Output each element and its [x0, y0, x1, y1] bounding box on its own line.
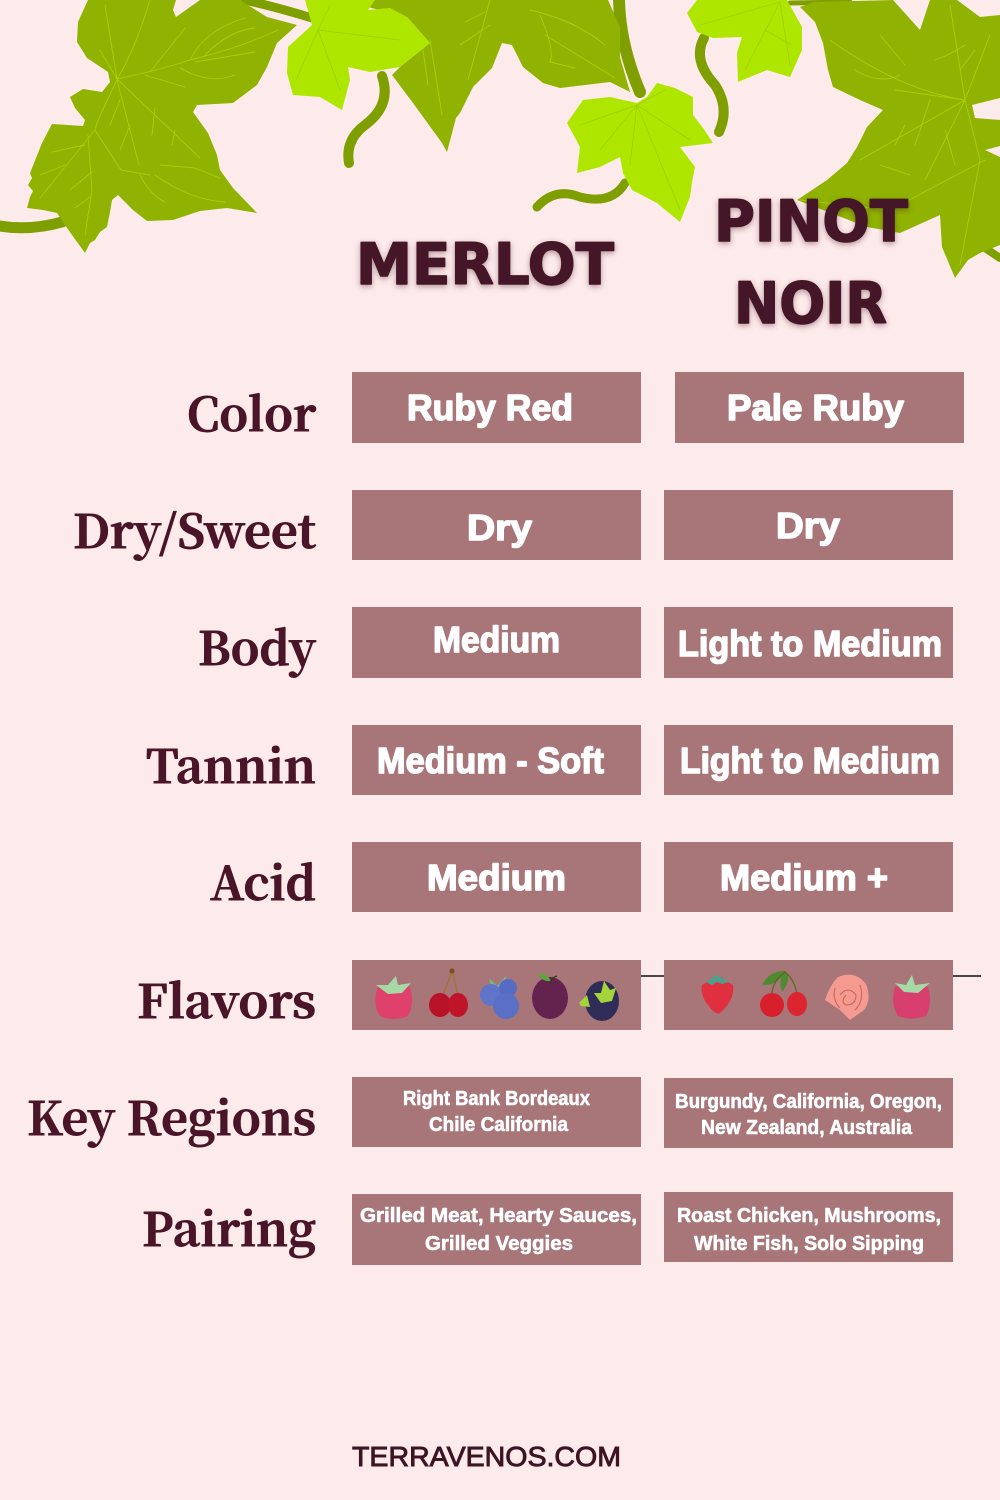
icon: raspberry	[375, 976, 412, 1019]
row: Tannin: Tannin	[146, 731, 316, 797]
column title: Merlot: MERLOT	[356, 232, 614, 298]
row: Tannin: Medium - Soft	[377, 740, 604, 781]
row: Body: Light to Medium	[678, 623, 942, 664]
light leaf centre	[567, 83, 713, 222]
row: Body	[198, 607, 953, 679]
row: Acid	[210, 842, 953, 914]
row: Key Regions: New Zealand, Australia	[701, 1117, 913, 1139]
big right leaf	[797, 0, 1000, 278]
row: Acid: Medium	[427, 857, 566, 898]
row: Color	[187, 372, 964, 445]
icon: cherries with leaves	[760, 970, 807, 1017]
footer website: TERRAVENOS.COM	[352, 1441, 621, 1472]
row: Acid: Acid	[210, 848, 316, 914]
row: Acid: Medium +	[720, 857, 888, 898]
column title: Pinot Noir: PINOT	[714, 189, 908, 255]
row: Body: Body	[198, 613, 316, 679]
row: Pairing: Pairing	[142, 1194, 316, 1260]
vine stems	[0, 0, 1000, 258]
row: Color: Ruby Red	[407, 387, 573, 428]
row: Dry/Sweet	[73, 490, 953, 562]
row: Color: Pale Ruby	[727, 387, 904, 428]
icon: raspberry	[893, 975, 930, 1018]
column title: Pinot Noir	[714, 189, 908, 337]
icon: rose	[825, 975, 869, 1020]
row: Key Regions: Burgundy, California, Oregon,	[675, 1091, 942, 1113]
row: Key Regions	[27, 1077, 953, 1149]
icon: cherries	[429, 968, 468, 1017]
row: Key Regions: Chile California	[429, 1114, 569, 1136]
icon: plum	[532, 974, 568, 1019]
row: Dry/Sweet: Dry/Sweet	[73, 496, 316, 562]
row: Dry/Sweet: Dry	[776, 505, 840, 546]
row: Key Regions: Key Regions	[27, 1083, 316, 1149]
light leaf top right	[687, 0, 802, 82]
vine leaves illustration	[0, 0, 1000, 278]
big left leaf	[27, 0, 297, 253]
row: Pairing: Grilled Veggies	[425, 1233, 573, 1255]
icon: strawberry	[702, 975, 733, 1013]
row: Color: Color	[187, 379, 316, 445]
column title: Pinot Noir: NOIR	[734, 271, 887, 337]
row: Flavors: Flavors	[137, 966, 316, 1032]
row: Body: Medium	[433, 619, 560, 660]
light leaf top left	[287, 0, 430, 110]
row: Pairing: Roast Chicken, Mushrooms,	[677, 1205, 941, 1227]
row: Dry/Sweet: Dry	[467, 507, 532, 548]
row: Flavors	[137, 960, 981, 1032]
icon: blackberry	[579, 981, 619, 1021]
row: Pairing: Grilled Meat, Hearty Sauces,	[360, 1205, 637, 1227]
row: Tannin	[146, 725, 953, 797]
row: Tannin: Light to Medium	[680, 740, 940, 781]
row: Pairing	[142, 1192, 953, 1265]
middle dark leaf	[368, 0, 630, 152]
row: Key Regions: Right Bank Bordeaux	[403, 1088, 590, 1110]
row: Pairing: White Fish, Solo Sipping	[694, 1233, 924, 1255]
icon: blueberries	[480, 976, 519, 1019]
